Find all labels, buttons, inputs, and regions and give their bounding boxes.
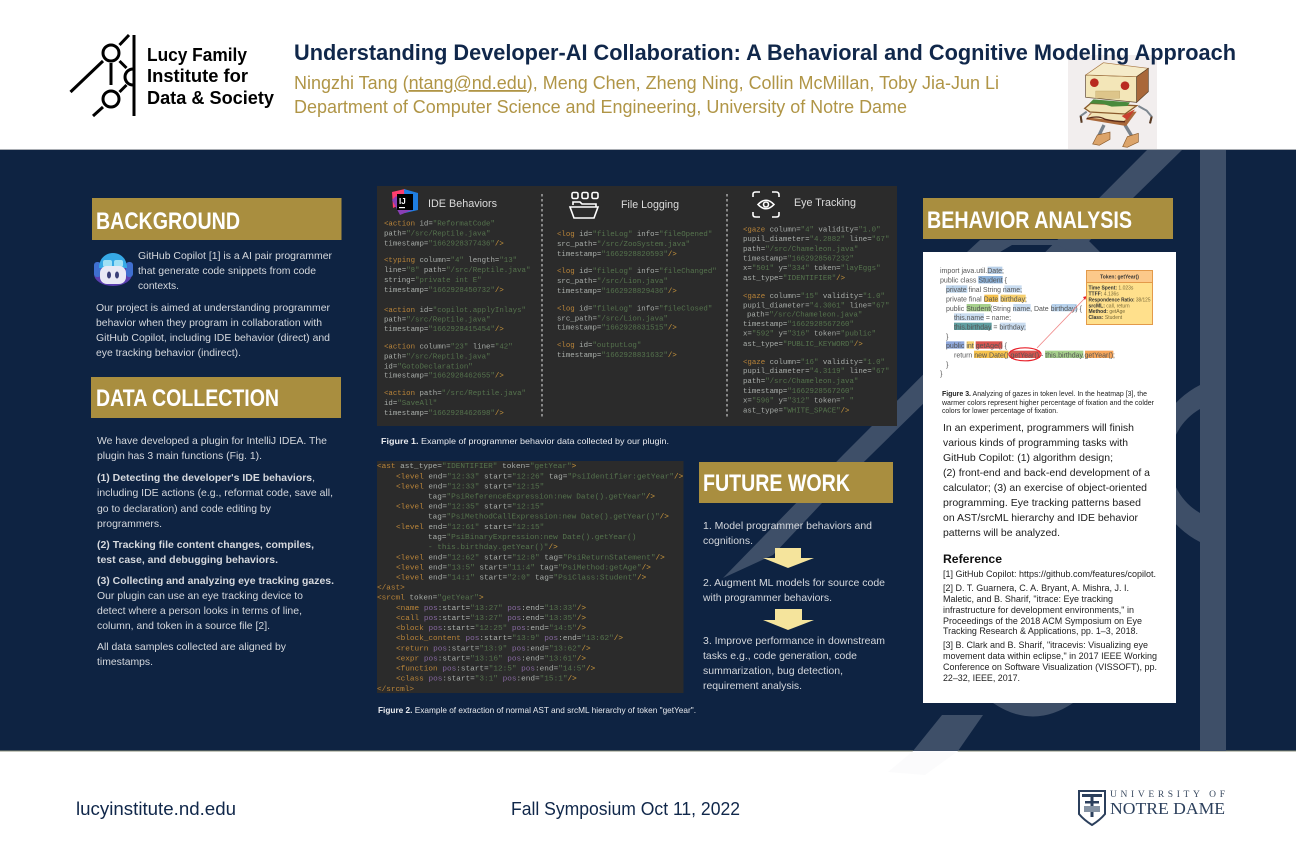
caption: figure 3 (941, 389, 1155, 415)
column headings (428, 197, 856, 211)
text: reference list: [3] B. Clark and B. Sharif, "itracevis: Visualizing eye (943, 640, 1148, 650)
code: eye tracking: <gaze column="16" validity="1.0" (743, 359, 885, 367)
text: reference list: [2] D. T. Guarnera, C. A. Bryant, A. Mishra, J. I. (943, 583, 1129, 593)
card: token getYear: Method: getAge (1088, 309, 1125, 315)
figure 2: AST and srcML code panel (377, 461, 684, 694)
code: eye tracking: pupil_diameter="4.3119" line="67" (743, 368, 889, 376)
figure 3: gaze heatmap on code: public Student(String name, Date birthday) { (946, 304, 1083, 313)
card: token getYear: srcML: call, return (1088, 304, 1130, 310)
card: token getYear: Token: getYear() (1100, 274, 1139, 280)
code: IDE behaviors: <action id="copilot.applyInlays" (384, 307, 526, 315)
figure 3: gaze heatmap on code: return new Date().getYear() - this.birthday.getYear(); (954, 350, 1115, 360)
text: plugin description: plugin has 3 main functions (Fig. 1). (97, 450, 262, 462)
code: file logging: timestamp="1662928831515"/> (557, 324, 677, 332)
panel: future work (699, 462, 893, 692)
code: eye tracking: x="596" y="312" token=" " (743, 398, 854, 406)
logo: Lucy Family Institute: Data & Society (147, 87, 275, 108)
text: plugin description: detect where a person looks in terms of line, (97, 605, 302, 617)
figure 2: AST and srcML code panel: <block pos:start="12:25" pos:end="14:5"/> (396, 625, 586, 633)
figure 2: AST and srcML code panel: <level end="12:62" start="12:8" tag="PsiReturnStatement"/> (396, 554, 665, 562)
code: IDE behaviors: id="GotoDeclaration" (384, 364, 473, 372)
column headings: Eye Tracking (794, 197, 856, 209)
code: file logging: <log id="fileLog" info="fileOpened" (557, 231, 712, 239)
text: step 2 (702, 577, 885, 604)
figure 2: AST and srcML code panel: <level end="12:61" start="12:15" (396, 524, 544, 532)
column headings: IDE Behaviors (428, 198, 497, 210)
figure 2: AST and srcML code panel: <level end="12:33" start="12:26" tag="PsiIdentifier:getYear"/> (396, 474, 684, 482)
title: Understanding Developer-AI Collaboration: A Behavioral and Cognitive Modeling Approach (294, 40, 1236, 65)
arrow: gaze to token card (1037, 296, 1087, 348)
logo: Lucy Family Institute: Lucy Family (147, 44, 248, 65)
icon: folder (570, 192, 598, 218)
figure 2: AST and srcML code panel: <block_content pos:start="13:9" pos:end="13:62"/> (396, 635, 623, 643)
code: file logging: src_path="/src/Lion.java" (557, 278, 668, 286)
figure 2: AST and srcML code panel: <level end="13:5" start="11:4" tag="PsiMethod:getAge"/> (396, 564, 651, 572)
panel: data collection (91, 377, 341, 668)
figure 2: AST and srcML code panel: <class pos:start="3:1" pos:end="15:1"/> (396, 676, 577, 684)
icon: copilot (94, 253, 133, 286)
heading: behavior analysis (923, 198, 1173, 239)
text: plugin description: All data samples collected are aligned by (97, 641, 287, 653)
text: reference list: Conference on Software Visualization (VISSOFT), pp. (943, 662, 1157, 672)
code: file logging (557, 231, 717, 360)
code: IDE behaviors: string="private int E" (384, 277, 482, 285)
code: eye tracking: ast_type="WHITE_SPACE"/> (743, 408, 850, 416)
caption: figure 2: Figure 2. Example of extraction of normal AST and srcML hierarchy of token "getYear". (378, 705, 696, 715)
figure 3: gaze heatmap on code: this.birthday = birthday; (954, 322, 1026, 332)
text: copilot intro: that generate code snippets from code (138, 265, 316, 277)
text: experiment description (943, 422, 1150, 539)
figure 2: AST and srcML code panel: <level end="12:35" start="12:15" (396, 504, 544, 512)
text: step 2: with programmer behaviors. (702, 592, 832, 604)
main navy panel with decorative bands (0, 149, 1296, 775)
figure 2: AST and srcML code panel: <function pos:start="12:5" pos:end="14:5"/> (396, 666, 596, 674)
code: eye tracking: path="/src/Chameleon.java" (743, 246, 858, 254)
text: project aim: behavior when they program in collaboration with (96, 317, 322, 329)
text: step 3: requirement analysis. (703, 680, 802, 692)
text: plugin description: Our plugin can use an eye tracking device to (97, 590, 303, 602)
text: experiment description: (2) front-end and back-end development of a (943, 467, 1150, 479)
logo: Lucy Family Institute (70, 35, 275, 116)
text: plugin description: programmers. (97, 518, 162, 530)
heading: background: BACKGROUND (96, 208, 240, 235)
text: step 3 (703, 635, 885, 692)
card: token getYear (1086, 270, 1152, 324)
text: step 1: cognitions. (703, 535, 753, 547)
heading: background (92, 198, 342, 240)
text: experiment description: on AST/srcML hierarchy and IDE behavior (943, 512, 1138, 524)
heading: reference: Reference (943, 552, 1002, 566)
code: file logging: src_path="/src/ZooSystem.java" (557, 241, 690, 249)
white content card (923, 252, 1176, 703)
text: reference list: infrastructure for development environments," in (943, 605, 1134, 615)
figure 3: gaze heatmap on code (940, 266, 1152, 378)
text: plugin description: (1) Detecting the developer's IDE behaviors, (97, 472, 315, 484)
text: step 2: 2. Augment ML models for source code (703, 577, 885, 589)
footer: Notre Dame logo: NOTRE DAME (1110, 799, 1225, 818)
figure 3: gaze heatmap on code: private final String name; (946, 285, 1022, 294)
text: plugin description: timestamps. (97, 656, 153, 668)
text: plugin description: test case, and debugging behaviors. (97, 554, 278, 566)
text: step 3: tasks e.g., code generation, code (703, 650, 857, 662)
code: eye tracking: timestamp="1662928567260" (743, 388, 854, 396)
figure 3: gaze heatmap on code: } (946, 332, 949, 341)
code: IDE behaviors: path="/src/Reptile.java" (384, 230, 490, 238)
text: plugin description: column, and token in a source file [2]. (97, 620, 270, 632)
text: plugin description: go to declaration) and code editing by (97, 503, 272, 515)
text: reference list: [1] GitHub Copilot: https://github.com/features/copilot. (943, 569, 1156, 579)
heading: future work (699, 462, 893, 503)
code: IDE behaviors: <action column="23" line="42" (384, 344, 513, 352)
figure 2: AST and srcML code panel: </srcml> (377, 686, 414, 694)
code: IDE behaviors: path="/src/Reptile.java" (384, 316, 490, 324)
code: IDE behaviors: timestamp="1662928415454"/> (384, 326, 504, 334)
text: experiment description: patterns will be analyzed. (943, 527, 1060, 539)
figure 2: AST and srcML code panel: <srcml token="getYear"> (377, 594, 484, 602)
text: step 3: 3. Improve performance in downstream (703, 635, 885, 647)
code: eye tracking: timestamp="1662928567232" (743, 256, 854, 264)
icon: IntelliJ: IJ (399, 197, 406, 206)
text: plugin description: (2) Tracking file content changes, compiles, (97, 539, 314, 551)
figure 2: AST and srcML code panel: tag="PsiMethodCallExpression:new Date().getYear()"/> (428, 514, 669, 522)
mascot: sandwich robot (1068, 55, 1157, 149)
code: IDE behaviors: <action path="/src/Reptile.java" (384, 390, 526, 398)
text: step 1 (703, 520, 872, 547)
column headings: File Logging (621, 199, 679, 211)
figure 2: AST and srcML code panel: <ast ast_type="IDENTIFIER" token="getYear"> (377, 463, 577, 471)
figure 3: gaze heatmap on code: } (946, 360, 949, 369)
text: step 3: summarization, bug detection, (703, 665, 843, 677)
code: eye tracking: path="/src/Chameleon.java" (743, 378, 858, 386)
code: eye tracking (743, 226, 889, 416)
text: plugin description: We have developed a plugin for IntelliJ IDEA. The (97, 435, 327, 447)
highlight: gaze oval (1009, 348, 1041, 361)
icon: IntelliJ (392, 189, 418, 215)
arrow: step 1 to step 2 (763, 548, 814, 568)
card: token getYear: Respondence Ratio: 38/125 (1088, 298, 1151, 304)
text: reference list: Maletic, and B. Sharif, "itrace: Eye tracking (943, 594, 1113, 604)
heading: data collection (91, 377, 341, 418)
caption: figure 3: Figure 3. Analyzing of gazes in token level. In the heatmap [3], the (942, 389, 1147, 398)
heading: data collection: DATA COLLECTION (96, 385, 279, 412)
code: IDE behaviors: line="8" path="/src/Reptile.java" (384, 267, 530, 275)
code: eye tracking: x="592" y="316" token="public" (743, 330, 876, 338)
text: reference list: Tracking Research & Applications, pp. 1–3, 2018. (943, 626, 1138, 636)
footer: event date: Fall Symposium Oct 11, 2022 (511, 798, 740, 819)
figure 2: AST and srcML code panel: </ast> (377, 584, 405, 592)
figure 2: AST and srcML code panel: <name pos:start="13:27" pos:end="13:33"/> (396, 605, 586, 613)
panel: behavior analysis (923, 198, 1176, 703)
figure 3: gaze heatmap on code: import java.util.Date; (940, 266, 1004, 275)
arrow: step 2 to step 3 (763, 609, 814, 630)
heading: future work: FUTURE WORK (703, 470, 851, 497)
figure 2: AST and srcML code panel: <level end="14:1" start="2:0" tag="PsiClass:Student"/> (396, 574, 647, 582)
footer: Notre Dame logo (1079, 790, 1225, 825)
text: experiment description: GitHub Copilot: (1) algorithm design; (943, 452, 1113, 464)
code: IDE behaviors (384, 220, 530, 418)
code: file logging: <log id="fileLog" info="fileClosed" (557, 306, 712, 314)
figure 3: gaze heatmap on code: private final Date birthday; (946, 294, 1027, 304)
figure 2: AST and srcML code panel: <level end="12:33" start="12:15" (396, 484, 544, 492)
code: file logging: <log id="outputLog" (557, 342, 641, 350)
text: experiment description: calculator; (3) an exercise of object-oriented (943, 482, 1147, 494)
text: experiment description: In an experiment, programmers will finish (943, 422, 1134, 434)
text: reference list: 22–32, IEEE, 2017. (943, 673, 1020, 683)
code: eye tracking: <gaze column="15" validity="1.0" (743, 293, 885, 301)
figure 2: AST and srcML code panel: - this.birthday.getYear()"/> (428, 544, 558, 552)
code: IDE behaviors: <action id="ReformatCode" (384, 220, 495, 228)
caption: figure 3: colors for lower percentage of fixation. (942, 406, 1058, 415)
text: copilot intro (138, 250, 332, 292)
caption: figure 3: warmer colors represent higher percentage of fixation and the colder (941, 398, 1155, 407)
figure 3: gaze heatmap on code: this.name = name; (954, 313, 1011, 322)
code: eye tracking: ast_type="IDENTIFIER"/> (743, 275, 846, 283)
code: eye tracking: ast_type="PUBLIC_KEYWORD"/> (743, 341, 863, 349)
panel: background (92, 198, 342, 359)
card: token getYear: Time Spent: 1.023s (1088, 286, 1134, 292)
text: experiment description: various kinds of programming tasks with (943, 437, 1128, 449)
code: IDE behaviors: timestamp="1662928462698"/> (384, 410, 504, 418)
figure 3: gaze heatmap on code: } (940, 369, 943, 378)
text: project aim: eye tracking behavior (indirect). (96, 347, 241, 359)
code: IDE behaviors: timestamp="1662928462655"/> (384, 372, 504, 380)
authors and affiliation (294, 73, 999, 117)
footer: Notre Dame logo: UNIVERSITY OF (1110, 790, 1225, 800)
text: plugin description: including IDE actions (e.g., reformat code, save all, (97, 487, 333, 499)
code: file logging: timestamp="1662928820593"/> (557, 251, 677, 259)
caption: figure 1: Figure 1. Example of programmer behavior data collected by our plugin. (381, 436, 669, 446)
icon: eye tracking (753, 192, 779, 217)
text: reference list (943, 569, 1157, 683)
code: file logging: timestamp="1662928831632"/> (557, 352, 677, 360)
code: eye tracking: path="/src/Chameleon.java" (747, 312, 862, 320)
code: eye tracking: pupil_diameter="4.2882" line="67" (743, 236, 889, 244)
text: project aim: Our project is aimed at understanding programmer (96, 302, 330, 314)
code: file logging: <log id="fileLog" info="fileChanged" (557, 268, 717, 276)
figure 2: AST and srcML code panel: <return pos:start="13:9" pos:end="13:62"/> (396, 646, 591, 654)
card: token getYear: TTFF: 4.136s (1088, 292, 1119, 298)
code: eye tracking: x="501" y="334" token="layEggs" (743, 265, 881, 273)
figure 2: AST and srcML code panel: <expr pos:start="13:16" pos:end="13:61"/> (396, 656, 586, 664)
figure 2: AST and srcML code panel: tag="PsiBinaryExpression:new Date().getYear() (428, 534, 636, 542)
card: token getYear: Class: Student (1088, 315, 1123, 321)
figure 3: gaze heatmap on code: public int getAge() { (946, 341, 1008, 350)
text: project aim (96, 302, 330, 359)
code: file logging: src_path="/src/Lion.java" (557, 316, 668, 324)
figure 1: behavior data code panel (377, 186, 897, 426)
authors and affiliation: Department of Computer Science and Engineering, University of Notre Dame (294, 97, 907, 117)
text: reference list: Proceedings of the 2018 ACM Symposium on Eye (943, 616, 1142, 626)
authors and affiliation: Ningzhi Tang (ntang@nd.edu), Meng Chen, Zheng Ning, Collin McMillan, Toby Jia-Jun Li (294, 73, 999, 93)
code: IDE behaviors: <typing column="4" length="13" (384, 257, 517, 265)
text: step 1: 1. Model programmer behaviors and (703, 520, 872, 532)
text: reference list: movement data within eclipse," in 2017 IEEE Working (943, 651, 1157, 661)
code: file logging: timestamp="1662928829436"/> (557, 288, 677, 296)
code: IDE behaviors: id="SaveAll" (384, 400, 437, 408)
text: experiment description: programming. Eye tracking patterns based (943, 497, 1141, 509)
logo: Lucy Family Institute: Institute for (147, 65, 248, 86)
text: plugin description: (3) Collecting and analyzing eye tracking gazes. (97, 575, 334, 587)
code: eye tracking: <gaze column="4" validity="1.0" (743, 226, 881, 234)
code: IDE behaviors: timestamp="1662928377436"/> (384, 240, 504, 248)
text: copilot intro: contexts. (138, 280, 179, 292)
code: IDE behaviors: path="/src/Reptile.java" (384, 354, 490, 362)
code: eye tracking: pupil_diameter="4.3061" line="67" (743, 302, 889, 310)
heading: behavior analysis: BEHAVIOR ANALYSIS (927, 207, 1132, 234)
text: plugin description (97, 435, 334, 668)
figure 2: AST and srcML code panel: tag="PsiReferenceExpression:new Date().getYear"/> (428, 494, 655, 502)
code: eye tracking: timestamp="1662928567260" (743, 321, 854, 329)
figure 2: AST and srcML code panel: <call pos:start="13:27" pos:end="13:35"/> (396, 615, 586, 623)
figure 3: gaze heatmap on code: public class Student { (940, 276, 1008, 284)
footer: website: lucyinstitute.nd.edu (76, 798, 236, 819)
code: IDE behaviors: timestamp="1662928450732"/> (384, 287, 504, 295)
text: project aim: GitHub Copilot, including IDE behavior (direct) and (96, 332, 330, 344)
text: copilot intro: GitHub Copilot [1] is a AI pair programmer (138, 250, 332, 262)
